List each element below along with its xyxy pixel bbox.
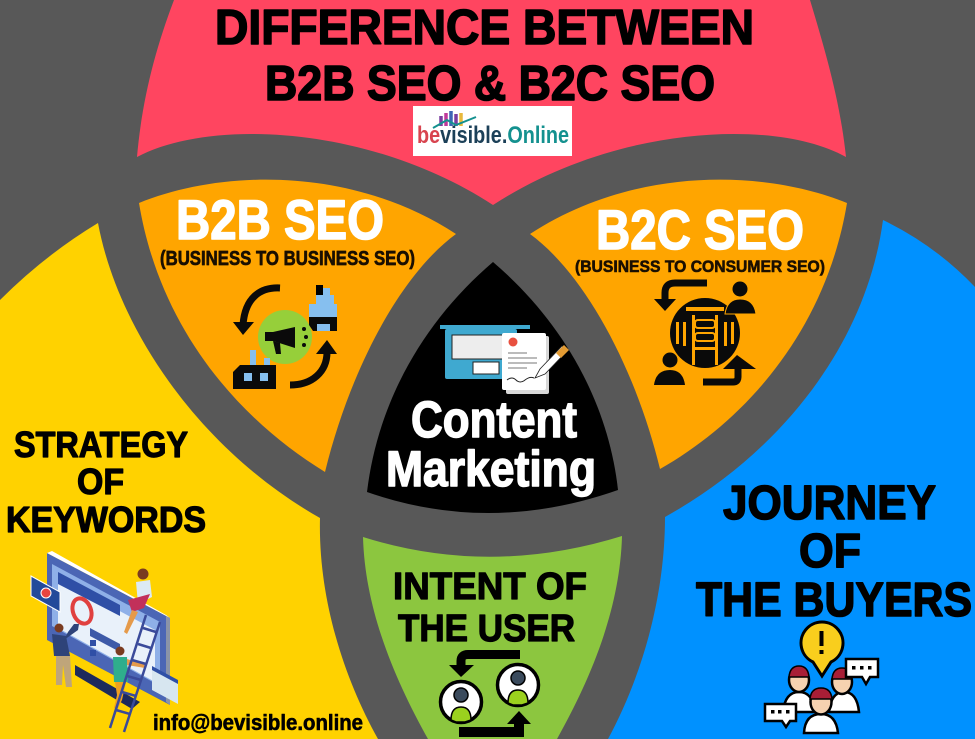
panel: strategy of keywords yellow region [0,223,378,739]
heading: strategy of keywords: STRATEGY [14,424,188,465]
panel: B2B SEO orange region [139,180,456,472]
icon: B2C store and customers cycle [654,282,756,385]
heading: B2C SEO: B2C SEO [596,198,804,261]
panel: journey of the buyers blue region [608,220,975,739]
heading: Content Marketing: Content [411,391,577,448]
heading: strategy of keywords [6,424,206,540]
title: B2B SEO & B2C SEO [265,57,715,111]
icon: buyers with speech bubbles [765,622,878,733]
title [215,1,754,111]
heading: journey of the buyers: OF [799,525,861,578]
icon: two users exchange [440,654,538,732]
contact email: info@bevisible.online [153,710,363,735]
heading: intent of the user: THE USER [398,608,575,650]
heading: B2B SEO: B2B SEO [176,188,384,251]
heading: strategy of keywords: KEYWORDS [6,499,206,540]
icon: laptop and signed document [440,325,569,394]
logo: bevisible.online: bevisible.Online [417,122,569,149]
title: DIFFERENCE BETWEEN [215,1,754,55]
heading: B2C SEO: (BUSINESS TO CONSUMER SEO) [575,257,825,276]
heading: intent of the user [393,566,587,650]
panel: intent of the user green region [363,536,622,739]
panel: content marketing black region [367,262,618,513]
heading: strategy of keywords: OF [77,461,124,502]
heading: journey of the buyers [696,477,972,627]
heading: Content Marketing: Marketing [386,441,596,497]
heading: journey of the buyers: JOURNEY [723,477,936,530]
heading: B2B SEO: (BUSINESS TO BUSINESS SEO) [160,248,415,270]
heading: intent of the user: INTENT OF [393,566,587,608]
heading: Content Marketing [386,391,596,497]
panel: B2C SEO orange region [530,180,847,469]
panel: pink title region [137,0,846,205]
illustration: people working on giant keyword screen [31,551,178,732]
logo: bevisible.online [413,106,572,156]
icon: B2B megaphone cycle [233,285,337,389]
